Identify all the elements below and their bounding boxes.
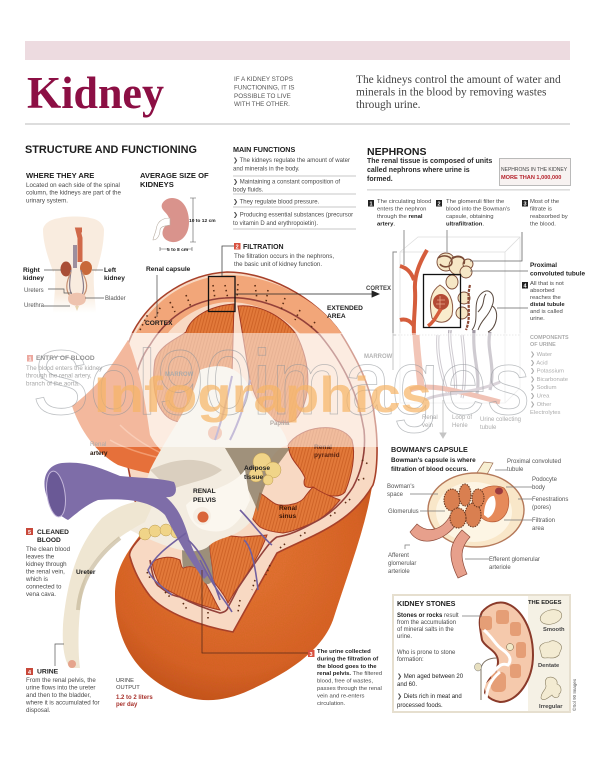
label: bowman's space: space bbox=[387, 492, 404, 498]
step 1 text: through the renal bbox=[377, 214, 423, 220]
step 5 cleaned blood: which is bbox=[25, 576, 48, 583]
icon: small kidney with dimensions bbox=[153, 198, 216, 253]
side note: WITH THE OTHER. bbox=[234, 101, 290, 108]
step 2 text: ultrafiltration. bbox=[446, 222, 484, 228]
convoluted tubule cluster bbox=[437, 253, 473, 319]
label: papilla: Papilla bbox=[270, 421, 290, 427]
urine output: per day bbox=[116, 702, 138, 708]
step 3 urine collected text: renal pelvis. The filtered bbox=[317, 671, 382, 677]
icon: smooth stone bbox=[539, 607, 563, 627]
label: renal pyramid: pyramid bbox=[314, 452, 340, 459]
tubule bbox=[466, 462, 493, 490]
label: marrow in kidney: MARROW bbox=[165, 372, 194, 378]
kidney stones heading: KIDNEY STONES bbox=[397, 599, 456, 608]
step 1 text: artery. bbox=[377, 222, 395, 228]
artery bbox=[400, 250, 427, 335]
step 2 text: 2 bbox=[437, 202, 441, 208]
label: left kidney: kidney bbox=[104, 275, 125, 282]
label: renal pelvis: PELVIS bbox=[193, 497, 217, 504]
bowman's capsule diagram bbox=[410, 462, 524, 578]
label: proximal convoluted tubule: Proximal bbox=[530, 262, 557, 269]
step 2 filtration text bbox=[234, 243, 334, 268]
nephrons intro: called nephrons where urine is bbox=[367, 167, 470, 174]
components of urine list: OF URINE bbox=[530, 342, 556, 348]
watermark orange text: Infographics bbox=[94, 367, 432, 423]
label: filtration area: area bbox=[532, 526, 545, 532]
label: extended area: EXTENDED bbox=[327, 305, 363, 312]
white translucent watermark band bbox=[0, 333, 595, 447]
label: urine collecting tubule: tubule bbox=[480, 425, 497, 431]
kidney stones text: Who is prone to stone bbox=[397, 650, 456, 656]
kidney cross-section bbox=[474, 602, 533, 702]
body labels bbox=[44, 270, 104, 306]
step 2 filtration text: FILTRATION bbox=[243, 244, 284, 251]
zoom frame bbox=[430, 285, 453, 322]
step 4 text: and is called bbox=[530, 309, 563, 315]
large kidney illustration bbox=[44, 272, 377, 700]
step 3 urine collected text: during the filtration of bbox=[317, 656, 378, 662]
step 3 text: the blood. bbox=[530, 222, 556, 228]
ureter bbox=[63, 500, 155, 668]
top colour band bbox=[25, 41, 570, 60]
label: renal pelvis: RENAL bbox=[193, 488, 216, 495]
step 5 cleaned blood: The clean blood bbox=[26, 546, 71, 553]
label: urethra: Urethra bbox=[24, 303, 45, 309]
cut section cortex bbox=[120, 272, 377, 632]
label: proximal convoluted tubule: convoluted tubule bbox=[530, 270, 585, 278]
main functions panel: body fluids. bbox=[233, 187, 264, 193]
bowman's capsule leaders bbox=[405, 470, 532, 559]
text block: where they are: urinary system. bbox=[26, 197, 68, 204]
label: cortex: CORTEX bbox=[145, 320, 173, 327]
label: irregular: Irregular bbox=[539, 704, 563, 710]
kidney stones text: ❯ Diets rich in meat and bbox=[397, 694, 462, 700]
step 4 text: reaches the bbox=[530, 295, 562, 301]
vein branches bbox=[148, 510, 272, 612]
bowman's capsule heading: filtration of blood occurs. bbox=[391, 466, 468, 473]
watermark outline text: Sol90images bbox=[32, 332, 530, 434]
step 4 text: urine. bbox=[530, 316, 545, 322]
step 3 urine collected text: 3 bbox=[309, 652, 313, 658]
label: bladder: Bladder bbox=[105, 296, 126, 302]
leader line to ureter bbox=[55, 644, 64, 666]
step 1 entry of blood bbox=[26, 355, 103, 387]
glass block outline bbox=[400, 237, 520, 403]
urine output bbox=[116, 678, 153, 708]
step 4 text: absorbed bbox=[530, 288, 555, 294]
main functions panel: MAIN FUNCTIONS bbox=[233, 145, 295, 154]
components of urine list: ❯ Potassium bbox=[530, 368, 564, 375]
callout: nephron count: NEPHRONS IN THE KIDNEY bbox=[501, 167, 568, 173]
label: left kidney: Left bbox=[104, 267, 117, 274]
components of urine list: ❯ Urea bbox=[530, 392, 550, 400]
zoom frame on kidney bbox=[208, 276, 235, 312]
step 2 filtration text: The filtration occurs in the nephrons, bbox=[234, 253, 334, 260]
label: fenestrations: (pores) bbox=[532, 505, 551, 511]
nephron diagram bbox=[393, 237, 520, 403]
podocyte bbox=[472, 486, 509, 522]
step 5 cleaned blood: leaves the bbox=[26, 554, 55, 560]
pyramids bbox=[152, 304, 354, 610]
components of urine list: ❯ Other bbox=[530, 401, 551, 408]
kidney stones text: of mineral salts in the bbox=[397, 627, 454, 633]
callout: nephron count: MORE THAN 1,000,000 bbox=[501, 175, 561, 181]
step 5 cleaned blood: vena cava. bbox=[26, 591, 56, 598]
step 3 urine collected text: The urine collected bbox=[317, 649, 371, 655]
kidney stones text: and 60. bbox=[397, 682, 417, 688]
components of urine list: ❯ Water bbox=[530, 351, 552, 358]
step 5 cleaned blood: the renal vein, bbox=[26, 568, 65, 576]
step 2 text bbox=[436, 199, 510, 228]
label: cortex right: CORTEX bbox=[366, 286, 391, 292]
step 4 urine: 4 bbox=[28, 670, 32, 676]
renal artery bbox=[72, 340, 208, 484]
label: renal vein: Renal bbox=[422, 415, 438, 421]
step 5 cleaned blood: CLEANED bbox=[37, 529, 69, 536]
label: extended area: AREA bbox=[327, 313, 346, 320]
label: filtration area: Filtration bbox=[532, 518, 555, 524]
step 1 entry of blood: branch of the aorta. bbox=[26, 380, 80, 387]
small calyx bbox=[193, 507, 211, 525]
step 3 leader bbox=[202, 570, 308, 653]
cortex blood vessels bbox=[133, 298, 365, 613]
step 4 text: 4 bbox=[523, 284, 527, 290]
icon: small kidney with dimensions: 5 to 8 cm bbox=[167, 247, 189, 253]
label: marrow: MARROW bbox=[364, 354, 393, 360]
label: renal capsule: Renal capsule bbox=[146, 266, 191, 273]
glomerulus bbox=[444, 484, 484, 528]
step 1 text: The circulating blood bbox=[377, 199, 431, 205]
renal vein bbox=[44, 463, 208, 579]
label: glomerulus: Glomerulus bbox=[388, 509, 419, 515]
filtration dots in cortex bbox=[140, 284, 368, 622]
kidney stones text: urine. bbox=[397, 634, 412, 640]
grey pelvis lower bbox=[182, 537, 213, 584]
step lines bbox=[404, 230, 528, 308]
main functions panel: and minerals in the body. bbox=[233, 166, 300, 172]
step 4 urine: disposal. bbox=[26, 707, 51, 714]
step 4 text: All that is not bbox=[530, 281, 564, 287]
step 1 text: 1 bbox=[369, 202, 373, 208]
label: podocyte body: body bbox=[532, 485, 545, 491]
step 5 cleaned blood: kidney through bbox=[26, 561, 67, 568]
urine output: OUTPUT bbox=[116, 685, 140, 691]
step 3 text: reabsorbed by bbox=[530, 214, 568, 220]
nephrons intro: formed. bbox=[367, 176, 393, 183]
step 5 cleaned blood: 5 bbox=[28, 530, 31, 536]
components of urine list: COMPONENTS bbox=[530, 335, 569, 341]
label: renal sinus: sinus bbox=[279, 513, 297, 520]
components of urine list: Electrolytes bbox=[530, 410, 561, 416]
bowman's capsule heading: BOWMAN'S CAPSULE bbox=[391, 445, 468, 454]
step 3 urine collected text: passes through the renal bbox=[317, 686, 382, 692]
step 1 text bbox=[368, 199, 431, 228]
side note: POSSIBLE TO LIVE bbox=[234, 93, 291, 100]
label: adipose tissue: tissue bbox=[244, 474, 263, 481]
step 1 text: enters the nephron bbox=[377, 206, 426, 212]
step 4 urine bbox=[25, 668, 100, 714]
label: renal vein: vein bbox=[422, 423, 433, 429]
text block: where they are: WHERE THEY ARE bbox=[26, 171, 94, 180]
body locator diagram bbox=[43, 216, 104, 313]
step 2 filtration text: 2 bbox=[236, 244, 239, 250]
arrow to bowman's capsule bbox=[440, 400, 446, 438]
main functions panel: ❯ Maintaining a constant composition of bbox=[233, 178, 340, 185]
cortex arrow bbox=[235, 291, 379, 297]
text block: where they are: Located on each side of the spinal bbox=[26, 182, 120, 189]
label: renal sinus: Renal bbox=[279, 505, 297, 512]
intro text: The kidneys control the amount of water and bbox=[356, 74, 561, 86]
step 3 urine collected text: blood, free of wastes, bbox=[317, 679, 373, 685]
label: renal pyramid: Renal bbox=[314, 444, 332, 451]
components of urine list bbox=[530, 335, 569, 416]
label: loop of henle: Henle bbox=[452, 423, 468, 429]
step 3 text: 3 bbox=[523, 202, 527, 208]
step 2 text: blood into the Bowman's bbox=[446, 206, 510, 212]
label: smooth: Smooth bbox=[543, 627, 565, 633]
label: ureters: Ureters bbox=[24, 288, 44, 294]
title: Kidney bbox=[27, 68, 164, 118]
heading: average size: AVERAGE SIZE OF bbox=[140, 171, 209, 180]
orange cortex top band bbox=[136, 275, 342, 334]
step 4 urine: urine flows into the ureter bbox=[26, 684, 95, 692]
image credit: ©Sol 90 Images bbox=[571, 678, 577, 711]
capsule bbox=[428, 473, 524, 547]
step 5 cleaned blood: connected to bbox=[26, 584, 62, 590]
step 1 entry of blood: 1 bbox=[28, 356, 32, 362]
step 4 urine: where it is accumulated for bbox=[25, 700, 100, 706]
label: afferent arteriole: Afferent bbox=[388, 553, 409, 559]
step 4 urine: From the renal pelvis, the bbox=[26, 677, 96, 684]
kidney stones text: Stones or rocks result bbox=[397, 613, 459, 619]
nephrons intro: The renal tissue is composed of units bbox=[367, 158, 492, 165]
adipose tissue bbox=[139, 453, 281, 540]
label: renal artery: Renal bbox=[90, 441, 106, 448]
renal pelvis bbox=[130, 366, 288, 551]
urine output: URINE bbox=[116, 678, 134, 684]
bowman's capsule heading bbox=[391, 445, 476, 473]
kidney stones text: formation: bbox=[397, 657, 424, 663]
intro text: through urine. bbox=[356, 99, 421, 111]
efferent arteriole bbox=[451, 530, 470, 578]
label: efferent arteriole: Efferent glomerular bbox=[489, 557, 540, 563]
kidney stones text: from the accumulation bbox=[397, 620, 456, 626]
main functions panel: to vitamin D and erythropoietin). bbox=[233, 221, 318, 227]
step 4 text bbox=[522, 281, 565, 322]
label: proximal convoluted tubule: Proximal convoluted bbox=[507, 459, 561, 465]
icon: small kidney with dimensions: 10 to 12 cm bbox=[189, 218, 216, 224]
label: adipose tissue: Adipose bbox=[244, 465, 270, 472]
label: right kidney: Right bbox=[23, 267, 41, 274]
icon: irregular stone bbox=[541, 677, 561, 700]
step 2 text: The glomeruli filter the bbox=[446, 199, 505, 205]
kidney stones text: ❯ Men aged between 20 bbox=[397, 674, 463, 680]
step 3 text: filtrate is bbox=[530, 206, 552, 212]
afferent arteriole bbox=[410, 516, 458, 541]
step 4 urine: and then to the bladder, bbox=[26, 692, 91, 699]
step 3 urine collected text: the blood goes to the bbox=[317, 664, 377, 670]
text block: where they are bbox=[26, 171, 121, 204]
text block: where they are: column, the kidneys are part of the bbox=[26, 190, 121, 197]
callout: nephron count bbox=[500, 158, 570, 186]
components of urine list: ❯ Bicarbonate bbox=[530, 376, 569, 383]
label: loop of henle: Loop of bbox=[452, 415, 472, 421]
torso silhouette bbox=[43, 216, 104, 313]
kidney stones text: processed foods. bbox=[397, 703, 443, 709]
icon: dentate stone bbox=[540, 641, 562, 658]
label: podocyte body: Podocyte bbox=[532, 477, 558, 483]
label: ureter: Ureter bbox=[76, 569, 96, 576]
step 1 entry of blood: through the renal artery, bbox=[26, 373, 92, 380]
section heading: STRUCTURE AND FUNCTIONING bbox=[25, 144, 197, 156]
label: the edges: THE EDGES bbox=[528, 600, 562, 606]
step 3 urine collected text: circulation. bbox=[317, 701, 346, 707]
step 3 text bbox=[522, 199, 568, 228]
heading: average size: KIDNEYS bbox=[140, 180, 174, 189]
side note: IF A KIDNEY STOPS bbox=[234, 76, 293, 83]
label: urine collecting tubule: Urine collecting bbox=[480, 417, 521, 423]
step 4 text: distal tubule bbox=[530, 302, 565, 308]
main functions panel: ❯ The kidneys regulate the amount of water bbox=[233, 157, 350, 164]
label: afferent arteriole: arteriole bbox=[388, 569, 410, 575]
label: dentate: Dentate bbox=[538, 663, 560, 669]
step 3 urine collected text bbox=[308, 649, 382, 707]
label: fenestrations: Fenestrations bbox=[532, 497, 568, 503]
step 2 filtration text: the basic unit of kidney function. bbox=[234, 261, 322, 268]
main functions panel: ❯ Producing essential substances (precursor bbox=[233, 211, 353, 218]
step 1 entry of blood: The blood enters the kidney bbox=[26, 365, 103, 372]
main functions panel: ❯ They regulate blood pressure. bbox=[233, 198, 320, 205]
step 5 cleaned blood: BLOOD bbox=[37, 537, 61, 544]
label: bowman's space: Bowman's bbox=[387, 484, 414, 490]
main functions panel bbox=[233, 145, 356, 229]
label: renal artery: artery bbox=[90, 450, 108, 457]
label: afferent arteriole: glomerular bbox=[388, 561, 416, 567]
step 4 urine: URINE bbox=[37, 668, 59, 676]
intro text: minerals in the blood by removing wastes bbox=[356, 87, 547, 99]
label: right kidney: kidney bbox=[23, 275, 44, 282]
label: efferent arteriole: arteriole bbox=[489, 565, 511, 571]
components of urine list: ❯ Acid bbox=[530, 359, 548, 366]
step 1 entry of blood: ENTRY OF BLOOD bbox=[36, 355, 95, 362]
outer kidney surface bbox=[115, 440, 375, 700]
side note: FUNCTIONING, IT IS bbox=[234, 84, 294, 91]
label: proximal convoluted tubule: tubule bbox=[507, 467, 524, 473]
step 3 text: Most of the bbox=[530, 199, 560, 205]
components of urine list: ❯ Sodium bbox=[530, 384, 557, 391]
urine output: 1.2 to 2 liters bbox=[116, 695, 153, 701]
panel: kidney stones bbox=[393, 595, 570, 712]
step 5 cleaned blood bbox=[25, 528, 71, 598]
nephrons heading: NEPHRONS bbox=[367, 146, 427, 158]
step 3 urine collected text: vein and re-enters bbox=[317, 693, 365, 699]
step 2 text: capsule, obtaining bbox=[446, 214, 494, 220]
bowman's capsule heading: Bowman's capsule is where bbox=[391, 457, 476, 464]
pale marrow tubules bbox=[438, 330, 492, 398]
